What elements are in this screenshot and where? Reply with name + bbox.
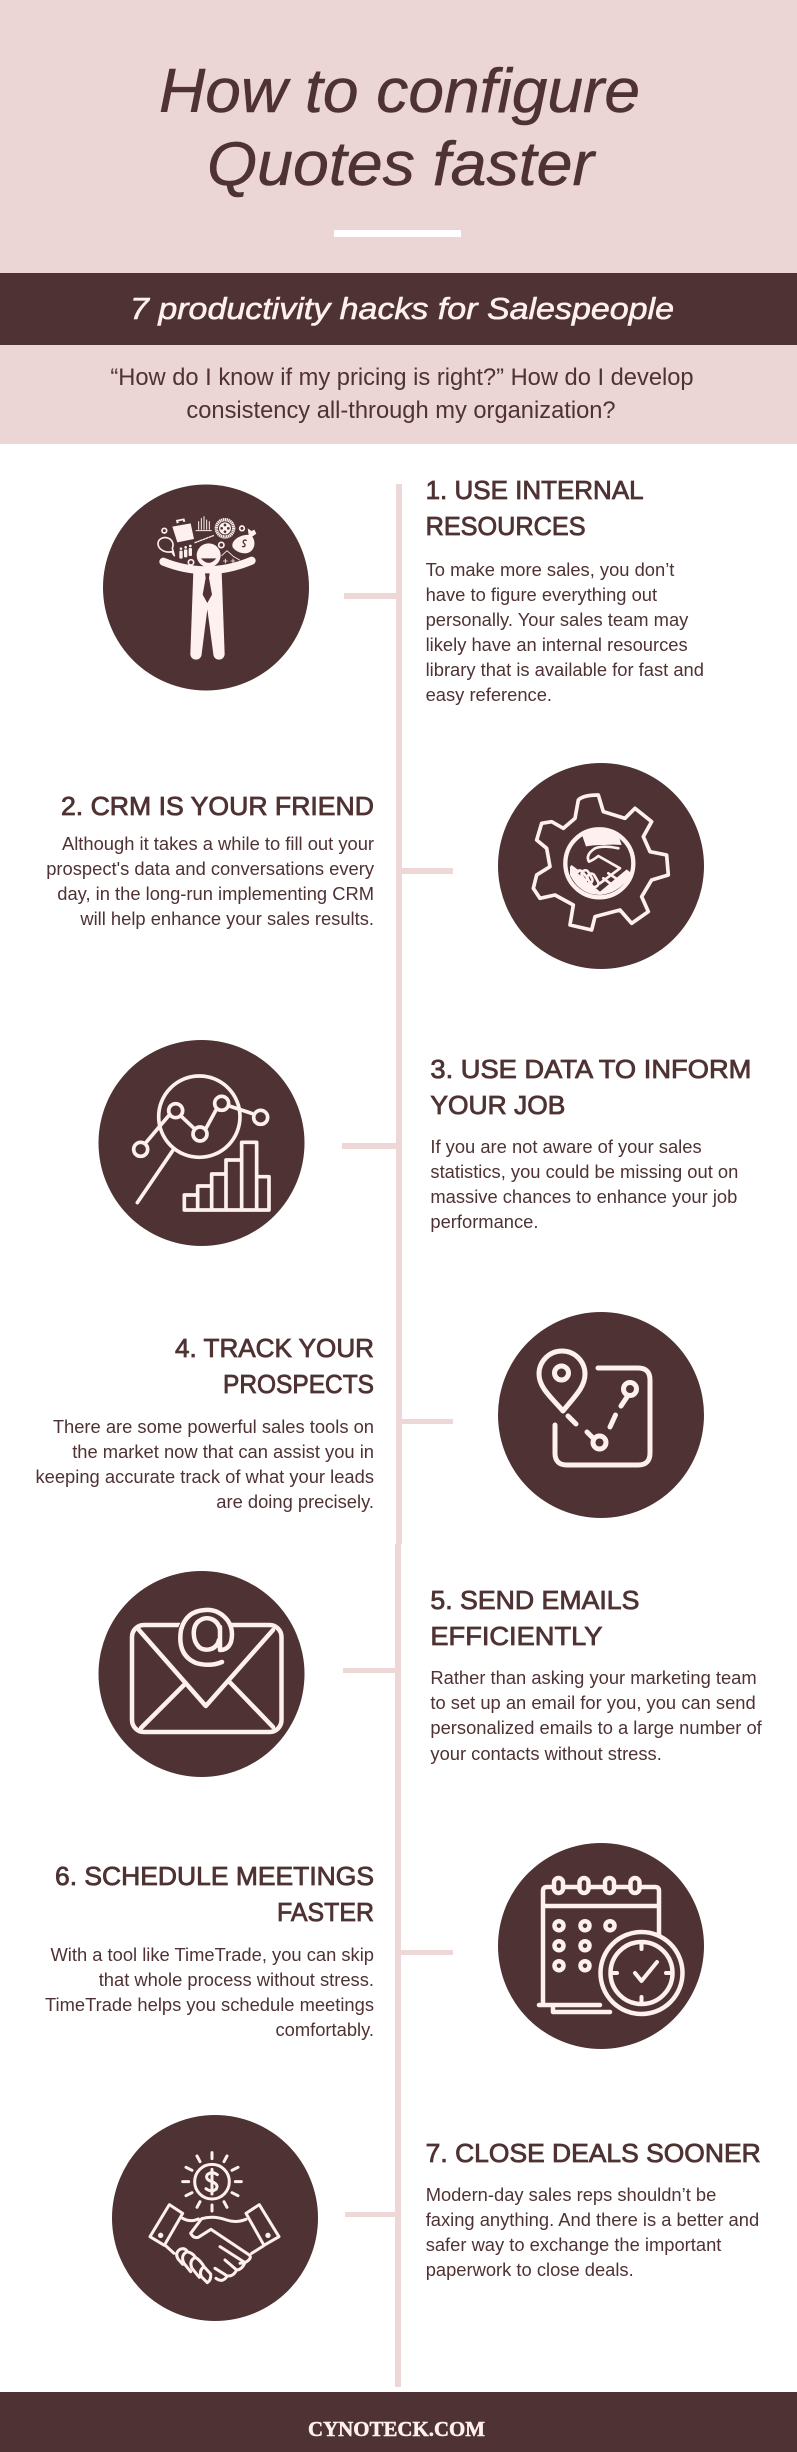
icon: gear with handshake	[498, 763, 704, 969]
body text: day, in the long-run implementing CRM	[57, 883, 374, 904]
icon: person with business ideas	[103, 484, 309, 690]
heading	[426, 475, 644, 541]
footer	[0, 2392, 797, 2452]
heading: 7. CLOSE DEALS SOONER	[426, 2138, 761, 2168]
body text: library that is available for fast and	[426, 659, 704, 680]
heading	[430, 1585, 639, 1651]
intro question: “How do I know if my pricing is right?” How do I develop	[110, 365, 694, 391]
body text: likely have an internal resources	[426, 634, 688, 655]
footer: CYNOTECK.COM	[308, 2417, 485, 2441]
body text: Modern-day sales reps shouldn’t be	[426, 2184, 716, 2205]
header panel	[0, 0, 797, 444]
body text: the market now that can assist you in	[72, 1441, 374, 1462]
body text: To make more sales, you don’t	[426, 559, 674, 580]
step 6	[45, 1843, 704, 2049]
body text: personalized emails to a large number of	[430, 1717, 763, 1738]
body text: will help enhance your sales results.	[79, 908, 374, 929]
heading	[175, 1333, 374, 1399]
body text: statistics, you could be missing out on	[430, 1161, 738, 1182]
heading: FASTER	[277, 1897, 374, 1927]
heading: 6. SCHEDULE MEETINGS	[55, 1861, 374, 1891]
body text: easy reference.	[426, 684, 552, 705]
subtitle banner: 7 productivity hacks for Salespeople	[130, 291, 674, 326]
title: How to configure	[159, 57, 640, 126]
icon: handshake with dollar coin	[112, 2115, 318, 2321]
heading: YOUR JOB	[430, 1090, 565, 1120]
body text: to set up an email for you, you can send	[430, 1692, 756, 1713]
body text: comfortably.	[275, 2019, 374, 2040]
body text: Rather than asking your marketing team	[430, 1667, 757, 1688]
heading: PROSPECTS	[223, 1369, 374, 1399]
icon: location pin and route	[498, 1312, 704, 1518]
body text: TimeTrade helps you schedule meetings	[45, 1994, 374, 2015]
title	[159, 57, 640, 199]
heading: EFFICIENTLY	[430, 1621, 602, 1651]
heading: 5. SEND EMAILS	[430, 1585, 639, 1615]
subtitle banner	[0, 273, 797, 345]
body text: faxing anything. And there is a better and	[426, 2209, 759, 2230]
timeline spine	[342, 484, 453, 2387]
body text: are doing precisely.	[216, 1491, 374, 1512]
heading	[55, 1861, 374, 1927]
body text: personally. Your sales team may	[426, 609, 689, 630]
body text: safer way to exchange the important	[426, 2234, 721, 2255]
step 5	[98, 1571, 763, 1777]
body text: have to figure everything out	[426, 584, 657, 605]
icon: magnifier over charts	[98, 1040, 304, 1246]
body text: keeping accurate track of what your leads	[35, 1466, 374, 1487]
title: Quotes faster	[207, 130, 596, 199]
heading: 1. USE INTERNAL	[426, 475, 644, 505]
body text: Although it takes a while to fill out your	[62, 833, 374, 854]
step 2	[46, 763, 704, 969]
step 4	[35, 1312, 704, 1518]
heading: RESOURCES	[426, 511, 586, 541]
body text: paperwork to close deals.	[426, 2259, 634, 2280]
heading: 2. CRM IS YOUR FRIEND	[61, 791, 374, 821]
body text: If you are not aware of your sales	[430, 1136, 702, 1157]
body text: your contacts without stress.	[430, 1743, 662, 1764]
title underline	[334, 230, 461, 237]
heading	[430, 1054, 751, 1120]
body text: prospect's data and conversations every	[46, 858, 375, 879]
icon: calendar and clock	[498, 1843, 704, 2049]
body text: performance.	[430, 1211, 538, 1232]
body text: With a tool like TimeTrade, you can skip	[50, 1944, 374, 1965]
body text: that whole process without stress.	[99, 1969, 374, 1990]
body text: There are some powerful sales tools on	[53, 1416, 374, 1437]
step 3	[98, 1040, 751, 1246]
step 7	[112, 2115, 761, 2321]
heading: 4. TRACK YOUR	[175, 1333, 374, 1363]
intro question: consistency all-through my organization?	[186, 398, 616, 424]
step 1	[103, 475, 704, 705]
heading: 3. USE DATA TO INFORM	[430, 1054, 751, 1084]
body text: massive chances to enhance your job	[430, 1186, 737, 1207]
icon: envelope with at sign	[98, 1571, 304, 1777]
